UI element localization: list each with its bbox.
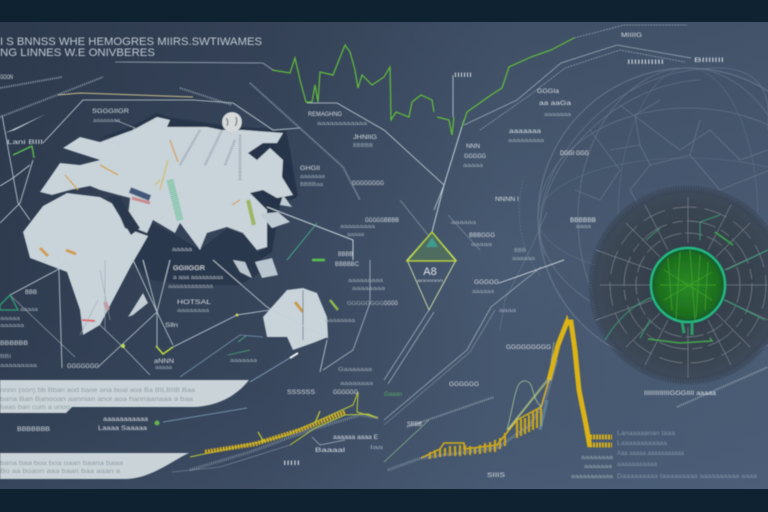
banner 1: nnnn (oon) bb Bban aod baoe ana boai aoa Ba BILBIIB Baa xyxy=(0,388,196,394)
banner 1 xyxy=(0,380,249,413)
bright labels: aa aaGa xyxy=(539,100,571,107)
bright labels: DGGI GGG xyxy=(560,150,589,157)
banner 2: Bo aa boaon aaa baan baa aaan a xyxy=(0,469,121,475)
bright labels: NNNN I xyxy=(495,196,519,203)
dim labels: aaaaa xyxy=(172,247,193,253)
bright labels: GGGGGGGGG xyxy=(506,344,551,351)
map route hatch xyxy=(180,130,240,180)
landmass: Indonesia xyxy=(233,258,278,278)
dim labels: aaaaa xyxy=(347,232,365,238)
bright labels: GGGGG xyxy=(474,279,499,286)
bright labels: NNN xyxy=(466,143,480,150)
bright labels: GGGGG xyxy=(464,153,486,160)
bright labels: BBB xyxy=(25,289,37,296)
right-side text block: Aaa aaaaa aaaaaaaaaaa xyxy=(617,451,685,457)
dim labels: aaaaaaaaa xyxy=(348,278,384,284)
bright labels: Lani BIII xyxy=(7,139,43,146)
dim labels: aaaaaaaaaaa xyxy=(571,474,614,480)
dim labels: aaaaaaa xyxy=(230,358,258,364)
title xyxy=(0,36,262,59)
title: I S BNNSS WHE HEMOGRES MIIRS.SWTIWAMES xyxy=(0,36,262,48)
bright labels: Baaaal xyxy=(315,447,346,454)
dim labels: Iaa xyxy=(370,445,385,451)
dim labels: Gaaaaaaa xyxy=(338,367,373,373)
bright labels: aaaaaaa xyxy=(509,128,541,135)
bright labels: MIIIIG xyxy=(621,32,642,39)
banner 2: bana baa boa boa oaan baana baaa xyxy=(0,461,124,467)
landmass: Eurasia xyxy=(40,117,293,250)
landmass: Madagascar xyxy=(128,293,148,317)
bright labels: aNNN xyxy=(154,358,174,365)
bright labels: IIIIIIIIIII xyxy=(627,59,664,66)
right-side text block xyxy=(617,431,758,480)
bright labels: BBBBBBB xyxy=(17,426,50,433)
dim labels: aaaa xyxy=(576,224,592,230)
bright labels: SBBB xyxy=(407,421,422,428)
bright labels: GHGII xyxy=(300,165,320,172)
dark radar disc xyxy=(588,185,768,385)
dim labels: aaaaaa xyxy=(0,323,25,329)
banner 1: baas ban cum a unoo xyxy=(0,405,71,411)
dashed hatch bands xyxy=(0,77,768,427)
dim labels: BBBBB xyxy=(353,143,373,149)
map colored data xyxy=(40,140,303,340)
dim labels: a aaa aaaaaaaaa xyxy=(173,275,224,281)
dim labels: aaaaaaaaa xyxy=(508,138,545,144)
dim labels: aaaa xyxy=(499,308,517,314)
bright labels: BBBB xyxy=(338,251,353,258)
bright labels: GOON xyxy=(0,74,13,81)
dim labels: aaaaaaaaa xyxy=(340,224,376,230)
green accent marks xyxy=(0,146,338,426)
diamond badge: annnnnn xyxy=(417,278,444,283)
dim labels: aaaaaaaaa xyxy=(0,363,38,369)
bright labels: GGGGGG xyxy=(333,389,358,396)
dim labels: aaaaa xyxy=(0,316,21,322)
bright labels: GGGG xyxy=(384,300,398,307)
dim labels: aaaaaaa xyxy=(584,464,613,470)
bright labels: HOTSAL xyxy=(177,299,211,306)
landmass: Australia xyxy=(263,288,328,350)
dim labels: aaaaaaaa xyxy=(177,308,210,314)
bright labels: IIIII xyxy=(283,460,300,467)
dim labels: aaaaa xyxy=(471,242,493,248)
dim labels: aaaaa xyxy=(463,163,484,169)
banner 1: bana Ban Banooan aannian anoi aoa hannaanaaa a baa xyxy=(0,397,194,403)
bright labels: BBBBBB xyxy=(570,217,596,224)
dim labels: aaaaaaaaaaaa xyxy=(317,121,368,127)
bright labels: Slln xyxy=(165,322,178,329)
dim labels: aaaaaaaaaaaa xyxy=(168,284,214,290)
bright labels: IIIIII xyxy=(454,72,472,79)
chart: yellow peak xyxy=(388,317,612,470)
bright labels: REMAGHNG xyxy=(308,111,342,118)
chart: left yellow band xyxy=(172,392,378,472)
line chart: green xyxy=(272,38,574,135)
dim labels: aaaaaaa xyxy=(544,112,572,118)
bright labels: GGGIa xyxy=(537,88,559,95)
dim labels: aaaaaa xyxy=(512,256,536,262)
bright labels: GGGGGGG xyxy=(67,363,99,370)
green label: Gaaan xyxy=(384,392,402,398)
bright labels: SGGGIIGR xyxy=(92,108,129,115)
bright labels: JHNIIG xyxy=(353,134,377,141)
small icon: left wing xyxy=(5,114,46,133)
bright labels: BBBBBB xyxy=(0,340,28,347)
dim labels xyxy=(0,112,614,480)
diamond badge: A8 xyxy=(423,266,437,278)
network lines xyxy=(0,25,691,462)
bright labels: SIIIS xyxy=(487,472,506,479)
right-side text block: Daaaaaaaaa Iaaaaaaaaa aaaaaaaaaa aaaa xyxy=(617,474,758,480)
green disc xyxy=(651,248,725,335)
globe wireframe xyxy=(500,68,768,368)
bright labels: IIIIIIIIIIIIIGGGIIII aaaaa xyxy=(644,390,716,397)
dark seas xyxy=(100,113,298,280)
bright labels: GGIIGGR xyxy=(173,265,205,272)
dim labels: aaaaaa xyxy=(472,289,495,295)
dim labels: aaaaaa xyxy=(451,220,477,226)
dim labels: GGGGGGGG xyxy=(347,301,384,307)
right-side text block: Laaaaaaaaaaaa xyxy=(617,441,668,447)
right-side text block: Lanaaaaanan taaa xyxy=(617,431,676,437)
bright labels: BIIIIIII xyxy=(694,57,724,64)
dim labels: aaaaa xyxy=(20,307,39,313)
bright labels: Laaaa Saaaaa xyxy=(98,425,147,432)
bright labels: SSSSSS xyxy=(287,389,316,396)
dim labels: aaaaaaaa xyxy=(325,318,356,324)
bright labels: BBBBBC xyxy=(335,261,359,268)
dim labels: aaaaaaaa xyxy=(340,381,374,387)
bright labels: GGGGGGGG xyxy=(352,180,384,187)
dim labels: aaaaaaaa xyxy=(352,286,386,292)
dim labels: aaaaa xyxy=(155,365,173,371)
bright labels: GGGGG xyxy=(365,217,384,224)
bright labels: BBBGGG xyxy=(469,232,495,239)
bright labels: aaaaaa aaaa E xyxy=(333,434,379,441)
diamond badge xyxy=(407,232,456,310)
bright labels: BBBB xyxy=(384,217,399,224)
dim labels: aaaaaaa xyxy=(300,174,326,180)
title: NG LINNES W.E ONIVBERES xyxy=(0,47,155,59)
bright labels: aaaaaaaaaaa xyxy=(103,416,148,423)
dim labels: aaaaaaaa xyxy=(581,455,614,461)
icon: moon sphere xyxy=(222,112,242,132)
dim labels: BBB xyxy=(514,248,526,254)
right-side text block: aaaaaaaaaaa xyxy=(617,462,658,468)
landmass: Africa xyxy=(23,193,148,335)
map xyxy=(23,113,328,350)
banner 2 xyxy=(0,453,189,479)
bright labels: GGGGGG xyxy=(449,381,479,388)
dim labels: BBBBaa xyxy=(300,182,324,188)
dim labels: BBI xyxy=(0,354,12,360)
dim labels: aaaaaaaa xyxy=(93,118,121,124)
